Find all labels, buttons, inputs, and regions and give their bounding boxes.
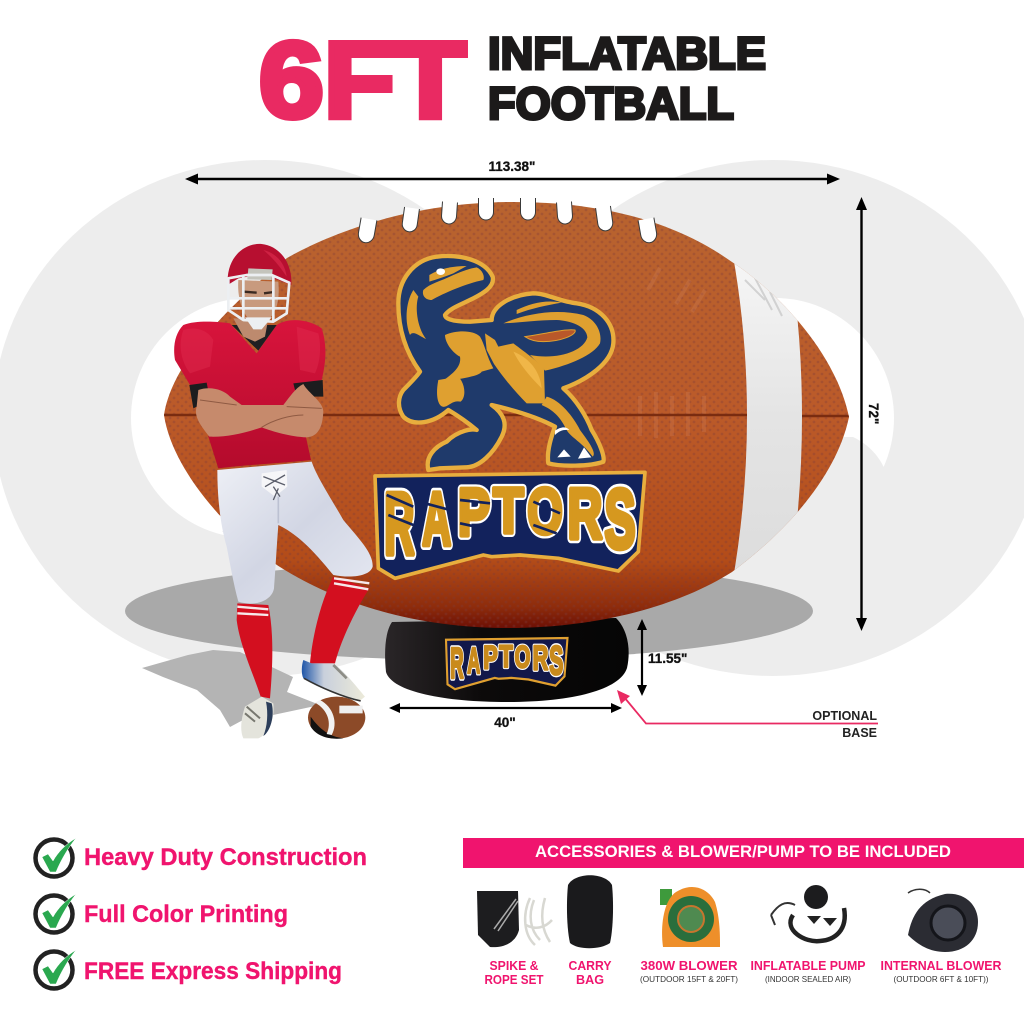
base logo: S bbox=[549, 638, 563, 683]
raptors logo on ball bbox=[375, 256, 645, 578]
title: INFLATABLE bbox=[488, 28, 766, 79]
eyes bbox=[244, 292, 274, 293]
base logo: R bbox=[533, 640, 549, 678]
label: spike and rope set: SPIKE & bbox=[490, 958, 538, 973]
facemask bbox=[228, 275, 289, 329]
icon: carry bag bbox=[567, 875, 613, 948]
base logo: R bbox=[450, 639, 464, 686]
small football bbox=[308, 697, 365, 739]
label: inflatable pump: (INDOOR SEALED AIR) bbox=[765, 974, 851, 984]
tail opening bbox=[525, 330, 575, 342]
raptors banner: R bbox=[384, 476, 414, 573]
pants bbox=[217, 462, 373, 604]
feature: full color printing: Full Color Printing bbox=[84, 901, 288, 928]
label: inflatable pump: INFLATABLE PUMP bbox=[750, 958, 866, 973]
raptors banner: P bbox=[458, 475, 490, 550]
raptors banner bbox=[375, 472, 645, 578]
raptors banner: R bbox=[568, 474, 602, 553]
base logo: A bbox=[467, 641, 480, 682]
icon: check mark bbox=[36, 894, 76, 932]
raptors banner: R bbox=[384, 476, 414, 573]
base logo: A bbox=[467, 641, 480, 682]
raised leg sock bbox=[310, 577, 369, 663]
base logo bbox=[446, 638, 568, 689]
raptors banner: A bbox=[422, 477, 451, 561]
feature: full color printing bbox=[36, 894, 288, 932]
raptors banner: R bbox=[568, 474, 602, 553]
raptors banner: T bbox=[493, 476, 524, 547]
raptors banner: P bbox=[458, 475, 490, 550]
title bbox=[259, 19, 766, 140]
dimension: base width 40 inches: 40" bbox=[494, 715, 516, 730]
callout: optional base: OPTIONAL bbox=[812, 709, 877, 723]
dimension: width 113.38 inches: 113.38" bbox=[489, 159, 535, 174]
label: internal blower: INTERNAL BLOWER bbox=[880, 958, 1002, 973]
feature: free express shipping: FREE Express Shipping bbox=[84, 958, 342, 985]
label: 380W blower: (OUTDOOR 15FT & 20FT) bbox=[640, 974, 738, 984]
icon: check mark bbox=[36, 950, 76, 988]
base logo: R bbox=[533, 640, 549, 678]
base logo: S bbox=[549, 638, 563, 683]
cleat on ball bbox=[302, 660, 365, 701]
crossed arms bbox=[196, 384, 323, 437]
inflation creases bbox=[640, 268, 705, 438]
white band bbox=[734, 264, 802, 570]
panel: accessories bbox=[463, 838, 1024, 987]
label: spike and rope set bbox=[484, 958, 544, 987]
dimension: base height 11.55 inches: 11.55" bbox=[648, 651, 687, 666]
feature: heavy duty construction: Heavy Duty Construction bbox=[84, 844, 367, 871]
feature: heavy duty construction bbox=[36, 838, 367, 876]
label: internal blower: (OUTDOOR 6FT & 10FT)) bbox=[894, 974, 989, 984]
callout: optional base bbox=[617, 690, 878, 740]
helmet bbox=[228, 244, 291, 285]
eye and claws bbox=[436, 268, 591, 459]
label: 380W blower: 380W BLOWER bbox=[640, 958, 738, 973]
ground shadow bbox=[125, 562, 813, 660]
inflatable base bbox=[385, 618, 629, 702]
sock stripes bbox=[237, 578, 369, 615]
callout: optional base: BASE bbox=[842, 726, 877, 740]
raptors banner: T bbox=[493, 476, 524, 547]
raptors banner: O bbox=[527, 474, 563, 547]
base logo: R bbox=[450, 639, 464, 686]
pants lacing bbox=[262, 470, 287, 523]
label: inflatable pump bbox=[750, 958, 866, 984]
icon: inflatable pump bbox=[771, 885, 845, 941]
neck and undershirt bbox=[232, 318, 277, 351]
label: 380W blower bbox=[640, 958, 738, 984]
icon: check mark bbox=[36, 838, 76, 876]
black undersleeves bbox=[189, 380, 323, 408]
standing leg sock bbox=[237, 603, 272, 698]
raptor mascot bbox=[398, 256, 613, 470]
centre seam bbox=[164, 415, 849, 416]
accessories heading bar bbox=[463, 838, 1024, 868]
raptors banner: O bbox=[527, 474, 563, 547]
dimension: base height 11.55 inches bbox=[637, 619, 687, 696]
title: 6FT bbox=[259, 19, 466, 140]
icon: 380W blower bbox=[660, 887, 720, 947]
jersey bbox=[174, 320, 325, 468]
icon: internal blower bbox=[908, 889, 978, 952]
label: spike and rope set: ROPE SET bbox=[484, 972, 544, 987]
raptors banner: A bbox=[422, 477, 451, 561]
standing cleat bbox=[241, 697, 274, 738]
dimension: base width 40 inches bbox=[389, 703, 622, 730]
background watermark shapes bbox=[0, 160, 1024, 676]
raptors banner: S bbox=[604, 473, 636, 566]
base logo: T bbox=[499, 639, 513, 674]
title: FOOTBALL bbox=[488, 78, 734, 129]
football player bbox=[174, 244, 373, 739]
jersey highlights bbox=[181, 327, 320, 373]
label: carry bag: BAG bbox=[576, 972, 604, 987]
player shadow bbox=[142, 650, 320, 727]
accessories heading bar: ACCESSORIES & BLOWER/PUMP TO BE INCLUDED bbox=[535, 842, 951, 861]
label: carry bag bbox=[568, 958, 612, 987]
dimension: height 72 inches bbox=[856, 197, 881, 631]
base logo: T bbox=[499, 639, 513, 674]
raptors banner: S bbox=[604, 473, 636, 566]
face bbox=[238, 280, 279, 321]
base logo: O bbox=[515, 639, 530, 675]
icon: spike and rope set bbox=[477, 891, 552, 947]
dimension: width 113.38 inches bbox=[185, 159, 840, 184]
gold markings bbox=[407, 266, 601, 457]
base logo: P bbox=[483, 639, 498, 675]
base logo: P bbox=[483, 639, 498, 675]
feature: free express shipping bbox=[36, 950, 342, 988]
label: carry bag: CARRY bbox=[568, 958, 612, 973]
base logo: O bbox=[515, 639, 530, 675]
label: internal blower bbox=[880, 958, 1002, 984]
laces bbox=[357, 198, 658, 244]
dimension: height 72 inches: 72" bbox=[866, 403, 881, 424]
football bbox=[160, 195, 855, 635]
